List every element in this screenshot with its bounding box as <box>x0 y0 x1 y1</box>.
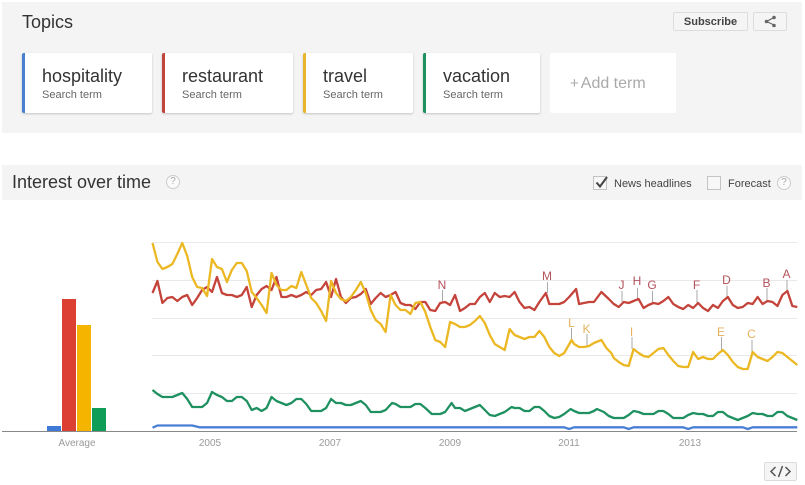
news markers: restaurant letters: D <box>722 273 731 287</box>
icon: forecast help <box>777 176 791 190</box>
panel: interest over time header <box>2 165 802 200</box>
line: hospitality <box>152 426 797 429</box>
heading: Topics: Topics <box>22 12 73 32</box>
news markers: travel letters: I <box>630 325 633 339</box>
news markers: restaurant letters: N <box>438 278 446 292</box>
line: travel <box>152 243 797 369</box>
button: embed <box>764 462 797 481</box>
news markers: stems <box>442 280 787 352</box>
news markers: travel letters: K <box>582 322 591 336</box>
card: travel: Search term <box>323 89 383 101</box>
axis labels: 2009 <box>439 438 462 449</box>
line: restaurant <box>152 277 797 311</box>
checkbox: news headlines <box>593 176 607 190</box>
card: restaurant <box>162 53 293 113</box>
button: subscribe <box>673 12 748 31</box>
heading: Interest over time: Interest over time <box>12 172 151 192</box>
news markers: restaurant letters: A <box>782 267 791 281</box>
card: vacation <box>423 53 540 113</box>
panel: topics <box>2 2 802 133</box>
button: subscribe: Subscribe <box>684 16 737 28</box>
bar chart: average <box>47 299 106 431</box>
news markers: restaurant letters: G <box>647 278 657 292</box>
news markers: restaurant letters: F <box>693 278 700 292</box>
axis labels <box>58 438 702 449</box>
card: vacation: vacation <box>443 66 510 86</box>
card: vacation: Search term <box>443 89 503 101</box>
card: add term <box>550 53 676 113</box>
news markers: travel letters: L <box>568 316 575 330</box>
news markers: restaurant letters: H <box>633 274 641 288</box>
button: share <box>753 12 787 31</box>
news markers: restaurant letters <box>438 267 791 292</box>
news markers: restaurant letters: B <box>762 276 771 290</box>
axis labels: 2013 <box>679 438 702 449</box>
card: add term: +Add term <box>570 75 646 92</box>
news markers: restaurant letters: M <box>542 269 552 283</box>
label: forecast: Forecast <box>728 178 771 190</box>
news markers: travel letters: C <box>747 327 756 341</box>
card: restaurant: Search term <box>182 89 242 101</box>
label: news headlines: News headlines <box>614 178 692 190</box>
axis labels: 2011 <box>558 438 580 449</box>
axis labels: 2005 <box>199 438 222 449</box>
axis labels: Average <box>58 438 96 449</box>
card: travel: travel <box>323 66 367 86</box>
card: hospitality: Search term <box>42 89 102 101</box>
icon: help: ? <box>170 176 176 187</box>
card: travel <box>303 53 413 113</box>
news markers: travel letters: E <box>717 325 725 339</box>
icon: forecast help: ? <box>781 177 787 188</box>
axis labels: 2007 <box>319 438 342 449</box>
line: vacation <box>152 390 797 420</box>
checkbox: forecast <box>707 176 721 190</box>
news markers: travel letters <box>568 316 756 341</box>
news markers: restaurant letters: J <box>618 278 624 292</box>
card: hospitality: hospitality <box>42 66 122 86</box>
card: hospitality <box>22 53 152 113</box>
icon: help <box>166 175 180 189</box>
card: restaurant: restaurant <box>182 66 263 86</box>
